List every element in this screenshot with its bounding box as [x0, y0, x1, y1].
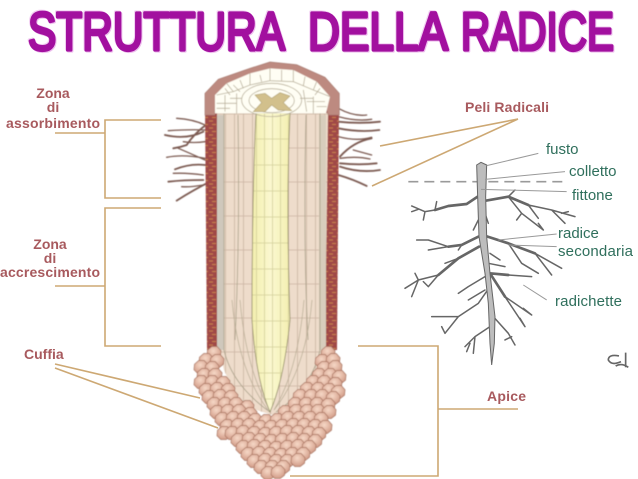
label: zona di assorbimento: di	[47, 99, 59, 115]
main taproot	[477, 162, 495, 365]
inner tissue	[217, 113, 328, 415]
label: zona di accrescimento: di	[44, 250, 56, 266]
plant part labels: fusto	[546, 141, 579, 158]
plant part labels: secondaria	[558, 243, 634, 260]
label: zona di accrescimento: accrescimento	[0, 264, 100, 280]
bracket: apice	[290, 346, 518, 476]
plant part labels: radichette	[555, 293, 622, 310]
logo mark	[608, 353, 628, 367]
plant part labels: fittone	[572, 187, 613, 204]
bracket: zona di assorbimento	[55, 120, 161, 198]
label: apice: Apice	[487, 388, 526, 404]
plant part labels: colletto	[569, 163, 617, 180]
label: zona di accrescimento: Zona	[33, 236, 67, 252]
branches	[405, 190, 575, 353]
label: peli radicali: Peli Radicali	[465, 99, 549, 115]
title: STRUTTURA	[28, 2, 285, 62]
root section diagram	[165, 62, 380, 479]
label: zona di assorbimento	[6, 85, 100, 131]
root cap cells	[194, 346, 346, 479]
title: DELLA	[308, 2, 448, 62]
plant root illustration	[405, 153, 628, 367]
leader lines: plant parts	[481, 153, 567, 300]
label: zona di accrescimento	[0, 236, 100, 280]
label: cuffia: Cuffia	[24, 346, 64, 362]
root crown with cells	[205, 62, 339, 117]
plant part labels	[546, 141, 634, 310]
label: zona di assorbimento: Zona	[36, 85, 70, 101]
title	[28, 2, 614, 62]
ground line	[408, 179, 567, 184]
root hairs	[165, 108, 380, 201]
bracket: zona di accrescimento	[55, 208, 161, 346]
leader lines: cuffia	[55, 364, 218, 428]
plant part labels: radice	[558, 225, 599, 242]
label: zona di assorbimento: assorbimento	[6, 115, 100, 131]
leader lines: peli radicali	[372, 119, 518, 186]
outer cortex bands	[205, 105, 339, 350]
